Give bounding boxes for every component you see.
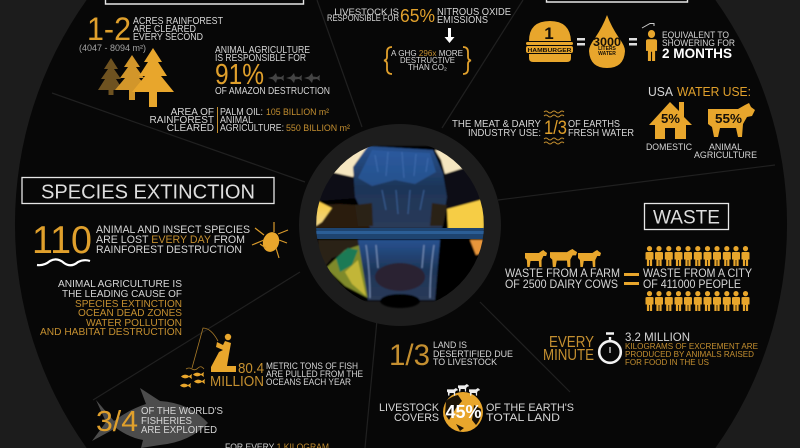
text: showering equivalent: 2 MONTHS <box>662 46 732 61</box>
stat: 91 percent of Amazon destruction <box>215 45 330 97</box>
stat: 3.2 million kilograms <box>625 332 758 367</box>
equals sign <box>577 38 585 46</box>
stat: 1-2 acres: 1-2 <box>87 11 131 47</box>
stat: area of rainforest cleared: AGRICULTURE: <box>220 123 284 134</box>
stat: 91 percent of Amazon destruction: IS RESPONSIBLE FOR <box>215 53 306 64</box>
arrow: down <box>444 28 454 43</box>
icon: water drop: 3000 <box>593 35 621 49</box>
callout: GHG 296x: A GHG 296x MORE <box>391 48 463 58</box>
stat: area of rainforest cleared: 550 BILLION m² <box>286 123 350 134</box>
panel: land <box>379 339 574 432</box>
stat: 80.4 million tons of fish: MILLION <box>210 373 264 390</box>
stat: area of rainforest cleared: CLEARED <box>167 123 214 134</box>
stat: 3.2 million kilograms: PRODUCED BY ANIMALS RAISED <box>625 349 754 359</box>
text: livestock covers land: COVERS <box>394 412 439 424</box>
chart: USA water use: WATER USE: <box>677 84 751 99</box>
text: livestock covers land: LIVESTOCK <box>379 402 440 414</box>
stat: 65 percent nitrous oxide: LIVESTOCK IS <box>334 7 399 18</box>
stat: 3.2 million kilograms: KILOGRAMS OF EXCREMENT ARE <box>625 341 758 351</box>
stat: one third desertified <box>389 339 513 372</box>
chart: USA water use: USA <box>648 84 673 99</box>
stat: 80.4 million tons of fish <box>210 360 363 390</box>
stat: 65 percent nitrous oxide <box>327 6 511 26</box>
heading: waste <box>644 204 728 230</box>
stat: three quarters of fisheries <box>92 388 223 448</box>
icon: hamburger <box>526 21 573 62</box>
stat: 3.2 million kilograms: 3.2 MILLION <box>625 332 690 344</box>
stat: area of rainforest cleared <box>150 107 350 134</box>
centre ring with cow photo <box>299 124 501 326</box>
panel: water use <box>452 0 757 161</box>
chart: USA water use: AGRICULTURE <box>694 150 757 161</box>
comparison text <box>505 268 752 291</box>
callout: GHG 296x: THAN CO₂ <box>408 62 447 72</box>
text: showering equivalent: EQUIVALENT TO <box>662 30 729 41</box>
stat: area of rainforest cleared: PALM OIL: <box>220 107 263 118</box>
icon: person showering <box>642 24 657 61</box>
illustration: cow behind rail <box>316 146 486 308</box>
icon: stopwatch <box>599 334 621 363</box>
stat: one third of fresh water: 1/3 <box>544 118 567 139</box>
stat: area of rainforest cleared: AREA OF <box>171 107 214 118</box>
text: showering equivalent <box>662 30 735 61</box>
chart: USA water use: ANIMAL <box>709 142 742 153</box>
icon: trees <box>98 48 174 107</box>
icon: three cows <box>525 249 601 267</box>
text: leading cause: OCEAN DEAD ZONES <box>78 307 182 319</box>
stat: 65 percent nitrous oxide: 65% <box>400 6 435 26</box>
stat: one third of fresh water <box>452 111 634 144</box>
stat: 80.4 million tons of fish: 80.4 <box>238 360 264 377</box>
stat: every minute <box>543 334 594 364</box>
stat: one third of fresh water: INDUSTRY USE: <box>468 128 541 139</box>
stat: 80.4 million tons of fish: ARE PULLED FROM THE <box>266 369 363 379</box>
stat: one third of fresh water: OF EARTHS <box>568 119 620 130</box>
stat: 1-2 acres: ACRES RAINFOREST <box>133 16 223 27</box>
text: showering equivalent: SHOWERING FOR <box>662 38 735 49</box>
chart: USA water use: 5% <box>661 111 680 126</box>
icon: globe with livestock <box>443 384 483 432</box>
icon: cow <box>708 103 755 137</box>
stat: one third of fresh water: FRESH WATER <box>568 128 634 139</box>
chart: USA water use: DOMESTIC <box>646 142 692 153</box>
stat: three quarters of fisheries: FISHERIES <box>141 416 192 427</box>
chart: USA water use <box>646 84 757 161</box>
stat: 1-2 acres <box>79 11 223 53</box>
stat: every minute: MINUTE <box>543 347 594 364</box>
icon: water drop: LITERS <box>598 46 617 52</box>
stat: area of rainforest cleared: RAINFOREST <box>150 115 214 126</box>
icon row: people top <box>646 246 750 266</box>
stat: one third desertified: TO LIVESTOCK <box>433 357 498 368</box>
text: leading cause <box>40 278 182 338</box>
icon: hamburger: 1 <box>544 24 554 43</box>
stat: 3.2 million kilograms: FOR FOOD IN THE US <box>625 357 709 367</box>
heading box: rainforest <box>106 0 304 4</box>
chart: USA water use: 55% <box>715 111 742 126</box>
panel: species extinction <box>22 178 363 448</box>
comparison text: WASTE FROM A FARM <box>505 268 620 280</box>
stat: 80.4 million tons of fish: METRIC TONS OF FISH <box>266 361 358 371</box>
text: livestock covers land <box>379 402 574 424</box>
stat: one third desertified: LAND IS <box>433 340 467 351</box>
comparison text: WASTE FROM A CITY <box>643 268 752 280</box>
text: leading cause: THE LEADING CAUSE OF <box>62 288 182 300</box>
stat: one third of fresh water: THE MEAT & DAIRY <box>452 119 541 130</box>
panel: deforestation <box>79 0 350 134</box>
stat: 65 percent nitrous oxide: NITROUS OXIDE <box>437 7 511 18</box>
stat: 65 percent nitrous oxide: RESPONSIBLE FOR <box>327 13 399 23</box>
stat: 1-2 acres: EVERY SECOND <box>133 32 203 43</box>
text: livestock covers land: OF THE EARTH'S <box>486 402 574 414</box>
stat: every minute: EVERY <box>549 334 594 351</box>
stat: 91 percent of Amazon destruction: OF AMAZON DESTRUCTION <box>215 86 330 97</box>
stat: one third desertified: DESERTIFIED DUE <box>433 349 513 360</box>
text: leading cause: WATER POLLUTION <box>86 317 182 329</box>
stat: three quarters of fisheries: 3/4 <box>96 406 138 438</box>
equals sign <box>629 38 637 46</box>
stat: one third desertified: 1/3 <box>389 339 430 372</box>
stat: area of rainforest cleared: 105 BILLION m² <box>266 107 329 118</box>
stat: three quarters of fisheries: ARE EXPLOITED <box>141 425 217 436</box>
text: leading cause: SPECIES EXTINCTION <box>75 298 182 310</box>
stat: area of rainforest cleared: ANIMAL <box>220 115 253 126</box>
icon: fisherman <box>180 328 236 388</box>
callout: GHG 296x: DESTRUCTIVE <box>400 55 455 65</box>
panel: greenhouse gas <box>327 6 511 74</box>
stat: 110 species: ANIMAL AND INSECT SPECIES <box>96 224 250 236</box>
stat: 110 species <box>32 219 250 265</box>
stat: 1-2 acres: (4047 - 8094 m²) <box>79 43 146 53</box>
text: leading cause: AND HABITAT DESTRUCTION <box>40 326 182 338</box>
icon: hamburger: HAMBURGER <box>528 48 572 54</box>
panel: waste <box>505 204 758 367</box>
icon row: people bottom <box>646 291 750 311</box>
text: livestock covers land: TOTAL LAND <box>486 412 560 424</box>
heading box: water <box>546 0 688 2</box>
icon: globe with livestock: 45% <box>446 402 482 422</box>
stat: three quarters of fisheries: OF THE WORLD'S <box>141 406 223 417</box>
stat: 110 species: RAINFOREST DESTRUCTION <box>96 244 242 256</box>
callout: GHG 296x <box>384 47 471 74</box>
icon: water drop: WATER <box>598 51 616 57</box>
stat: 91 percent of Amazon destruction: 91% <box>215 59 264 91</box>
icon: house <box>649 102 692 139</box>
stat: 91 percent of Amazon destruction: ANIMAL AGRICULTURE <box>215 45 310 56</box>
icon: water drop <box>589 15 625 68</box>
text: leading cause: ANIMAL AGRICULTURE IS <box>58 278 182 290</box>
comparison text: OF 411000 PEOPLE <box>643 279 741 291</box>
stat: 1-2 acres: ARE CLEARED <box>133 24 196 35</box>
stat: 80.4 million tons of fish: OCEANS EACH YEAR <box>266 377 351 387</box>
stat: 110 species: 110 <box>32 219 92 262</box>
stat: 65 percent nitrous oxide: EMISSIONS <box>437 15 488 26</box>
comparison text: OF 2500 DAIRY COWS <box>505 279 618 291</box>
icon: tick <box>252 222 288 258</box>
stat: 110 species: ARE LOST EVERY DAY FROM <box>96 234 245 246</box>
heading: species extinction: SPECIES EXTINCTION <box>41 182 255 204</box>
heading: waste: WASTE <box>653 208 720 228</box>
